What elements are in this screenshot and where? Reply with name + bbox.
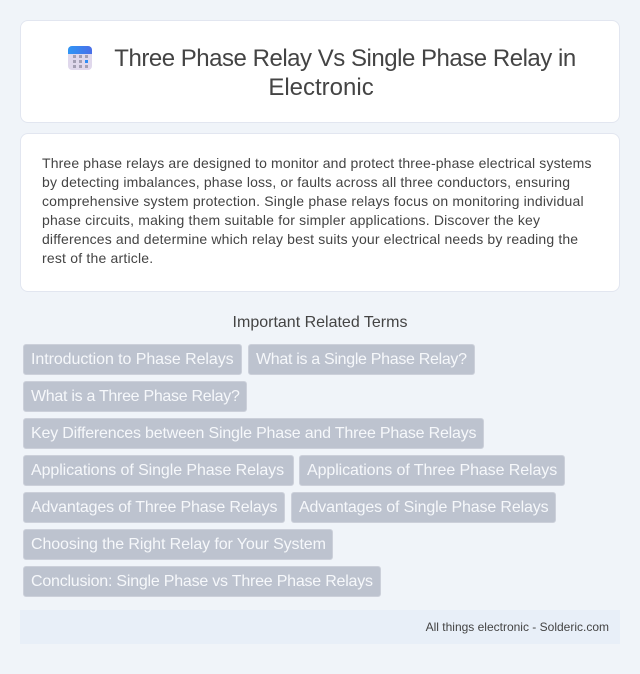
footer credit: All things electronic - Solderic.com — [426, 620, 609, 634]
tag: Introduction to Phase Relays — [31, 351, 234, 368]
intro paragraph: comprehensive system protection. Single phase relays focus on monitoring individual — [42, 193, 584, 209]
tag: What is a Single Phase Relay? — [256, 351, 467, 368]
title — [114, 45, 576, 101]
tag: Advantages of Three Phase Relays — [31, 499, 277, 516]
tag — [23, 418, 484, 449]
tag — [299, 455, 565, 486]
tag: Advantages of Single Phase Relays — [299, 499, 548, 516]
tag list — [23, 344, 565, 597]
intro paragraph: differences and determine which relay best suits your electrical needs by reading the — [42, 231, 578, 247]
tag — [23, 344, 242, 375]
intro paragraph: rest of the article. — [42, 250, 153, 266]
header card — [20, 20, 620, 123]
tag — [23, 381, 247, 412]
tag — [23, 566, 381, 597]
title: Three Phase Relay Vs Single Phase Relay in — [114, 45, 576, 72]
intro paragraph: phase circuits, making them suitable for simpler applications. Discover the key — [42, 212, 540, 228]
icon: calendar — [68, 46, 92, 70]
intro paragraph — [42, 155, 592, 266]
tag: Key Differences between Single Phase and Three Phase Relays — [31, 425, 476, 442]
section heading: important related terms: Important Related Terms — [233, 314, 407, 331]
tag: Applications of Single Phase Relays — [31, 462, 284, 479]
tag — [23, 492, 285, 523]
tag: Applications of Three Phase Relays — [307, 462, 557, 479]
tag: What is a Three Phase Relay? — [31, 388, 240, 405]
tag — [23, 529, 333, 560]
tag — [291, 492, 556, 523]
tag — [23, 455, 294, 486]
intro paragraph: Three phase relays are designed to monitor and protect three-phase electrical systems — [42, 155, 592, 171]
title: Electronic — [268, 74, 374, 101]
tag: Choosing the Right Relay for Your System — [31, 536, 326, 553]
footer bar — [20, 610, 620, 644]
intro text panel — [20, 133, 620, 292]
tag: Conclusion: Single Phase vs Three Phase Relays — [31, 573, 373, 590]
tag — [248, 344, 475, 375]
intro paragraph: by detecting imbalances, phase loss, or faults across all three conductors, ensuring — [42, 174, 570, 190]
